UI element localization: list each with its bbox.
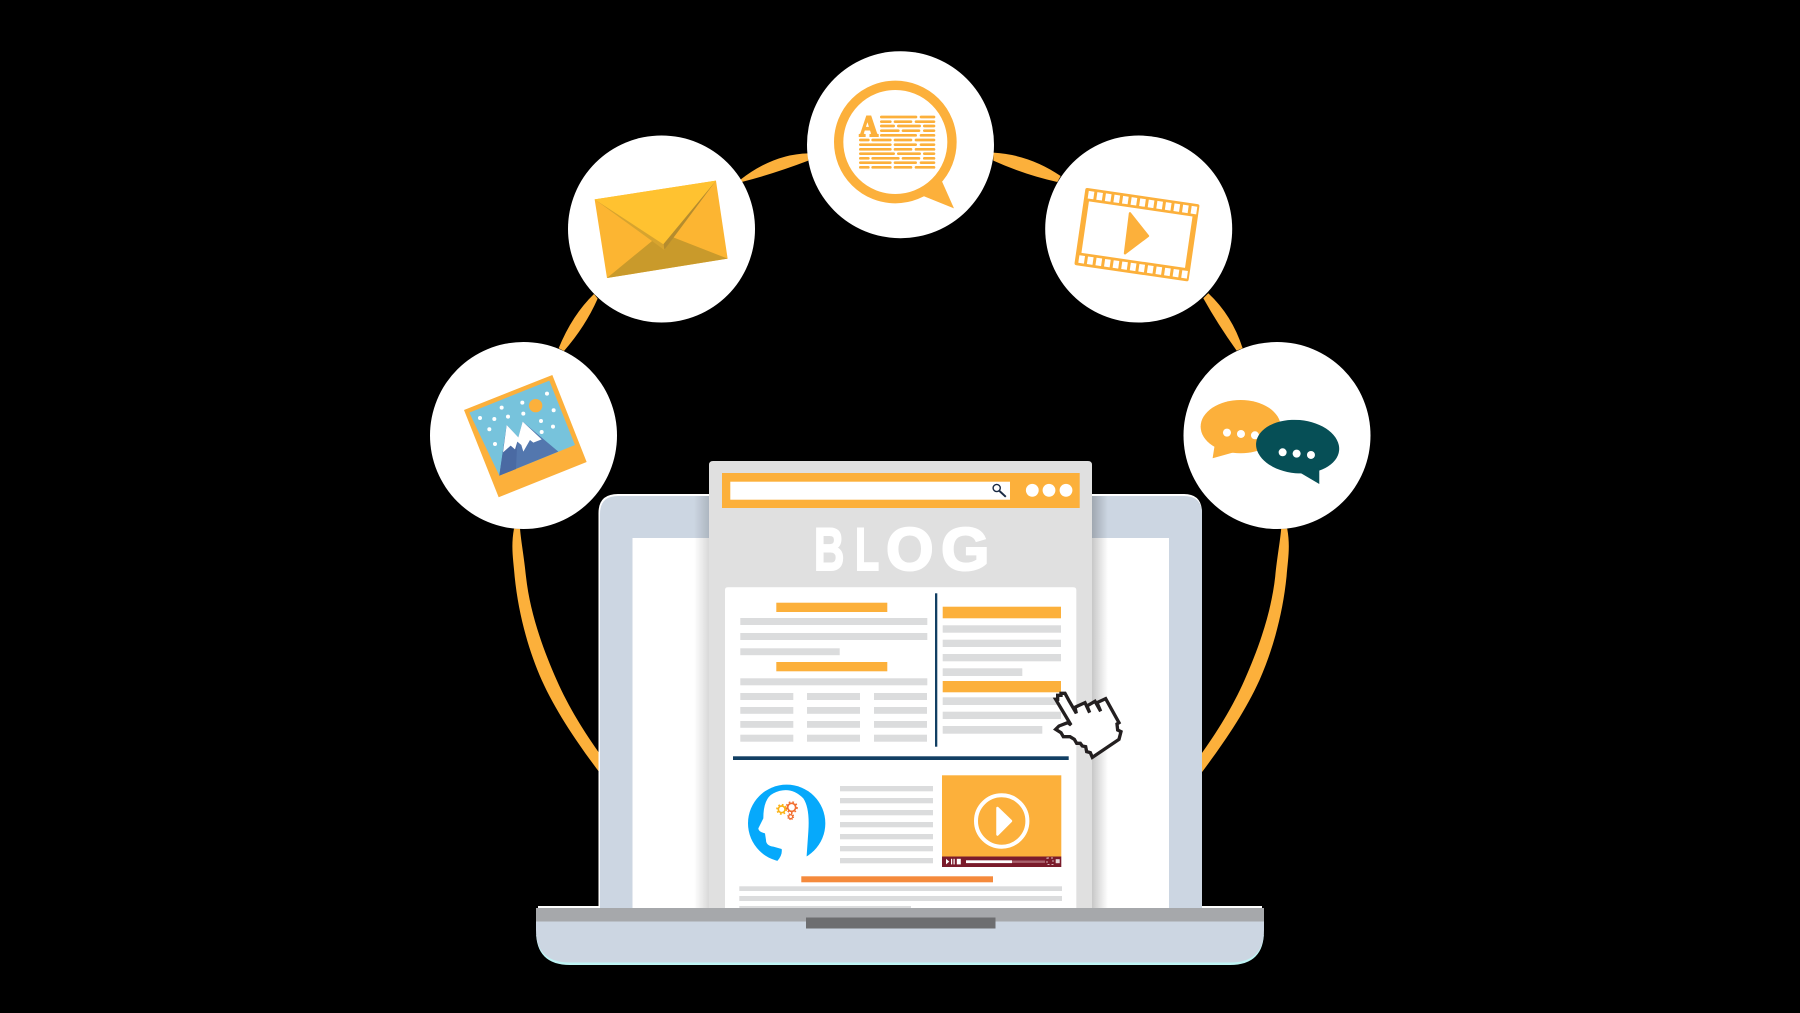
icon: speech bubble with article bbox=[839, 85, 954, 208]
heading: BLOG: B bbox=[814, 516, 844, 583]
arc: photo to mail bbox=[559, 294, 598, 351]
laptop hinge stripe bbox=[536, 908, 1264, 922]
heading: BLOG: L bbox=[855, 516, 879, 583]
panel: article circle bbox=[807, 51, 994, 238]
laptop bbox=[536, 494, 1264, 965]
left hinge highlight bbox=[538, 906, 600, 908]
page shadow left bbox=[694, 496, 710, 908]
lines next to head bbox=[840, 786, 933, 863]
connecting arcs bbox=[512, 153, 1289, 774]
icon: head with gears bbox=[748, 785, 825, 867]
search field bbox=[730, 482, 1010, 500]
article lines bbox=[860, 117, 934, 167]
blog page bbox=[709, 461, 1092, 908]
play button bbox=[976, 795, 1027, 847]
heading: BLOG: O bbox=[886, 516, 934, 583]
icon: magnifier bbox=[993, 484, 1006, 497]
icon: chat bubbles bbox=[1201, 400, 1341, 484]
arc: mail to article bbox=[740, 153, 808, 182]
laptop lid edge highlight bbox=[598, 494, 1202, 909]
right column text bbox=[943, 607, 1061, 734]
laptop base bbox=[536, 931, 1264, 965]
icon: film strip bbox=[1074, 188, 1200, 282]
laptop notch bbox=[806, 918, 996, 928]
photo frame and sky bbox=[464, 375, 587, 497]
browser bar bbox=[722, 473, 1080, 508]
heading: BLOG: G bbox=[941, 516, 990, 583]
player controls bbox=[942, 856, 1061, 867]
window dots bbox=[1026, 484, 1072, 497]
icon: envelope bbox=[595, 181, 728, 278]
letter A: A bbox=[859, 110, 878, 143]
right hinge highlight bbox=[1202, 906, 1262, 908]
arc: right lower bbox=[1201, 529, 1289, 774]
laptop lid bbox=[600, 496, 1202, 909]
panel: photo circle bbox=[430, 342, 617, 529]
content card bbox=[725, 587, 1076, 908]
icon: pixel hand cursor bbox=[1056, 693, 1121, 757]
bottom text lines bbox=[739, 886, 1062, 908]
column divider bbox=[935, 593, 937, 747]
panel: video circle bbox=[1045, 136, 1232, 322]
video player bbox=[942, 775, 1061, 867]
panel: email circle bbox=[568, 136, 755, 322]
heading: BLOG bbox=[814, 516, 990, 583]
arc: left lower bbox=[512, 529, 601, 774]
arc: video to chat bbox=[1203, 293, 1243, 351]
panel: chat circle bbox=[1184, 342, 1370, 529]
table of lines bbox=[740, 693, 927, 742]
page background bbox=[709, 461, 1092, 908]
laptop screen bbox=[632, 538, 1169, 909]
icon: mountain photo bbox=[464, 375, 587, 497]
snowy mountains bbox=[499, 422, 558, 476]
page shadow right bbox=[1092, 496, 1108, 908]
arc: article to video bbox=[993, 153, 1061, 182]
horizontal divider bbox=[733, 756, 1069, 760]
orange subheading bar bbox=[801, 876, 993, 882]
left column text bbox=[740, 603, 927, 742]
